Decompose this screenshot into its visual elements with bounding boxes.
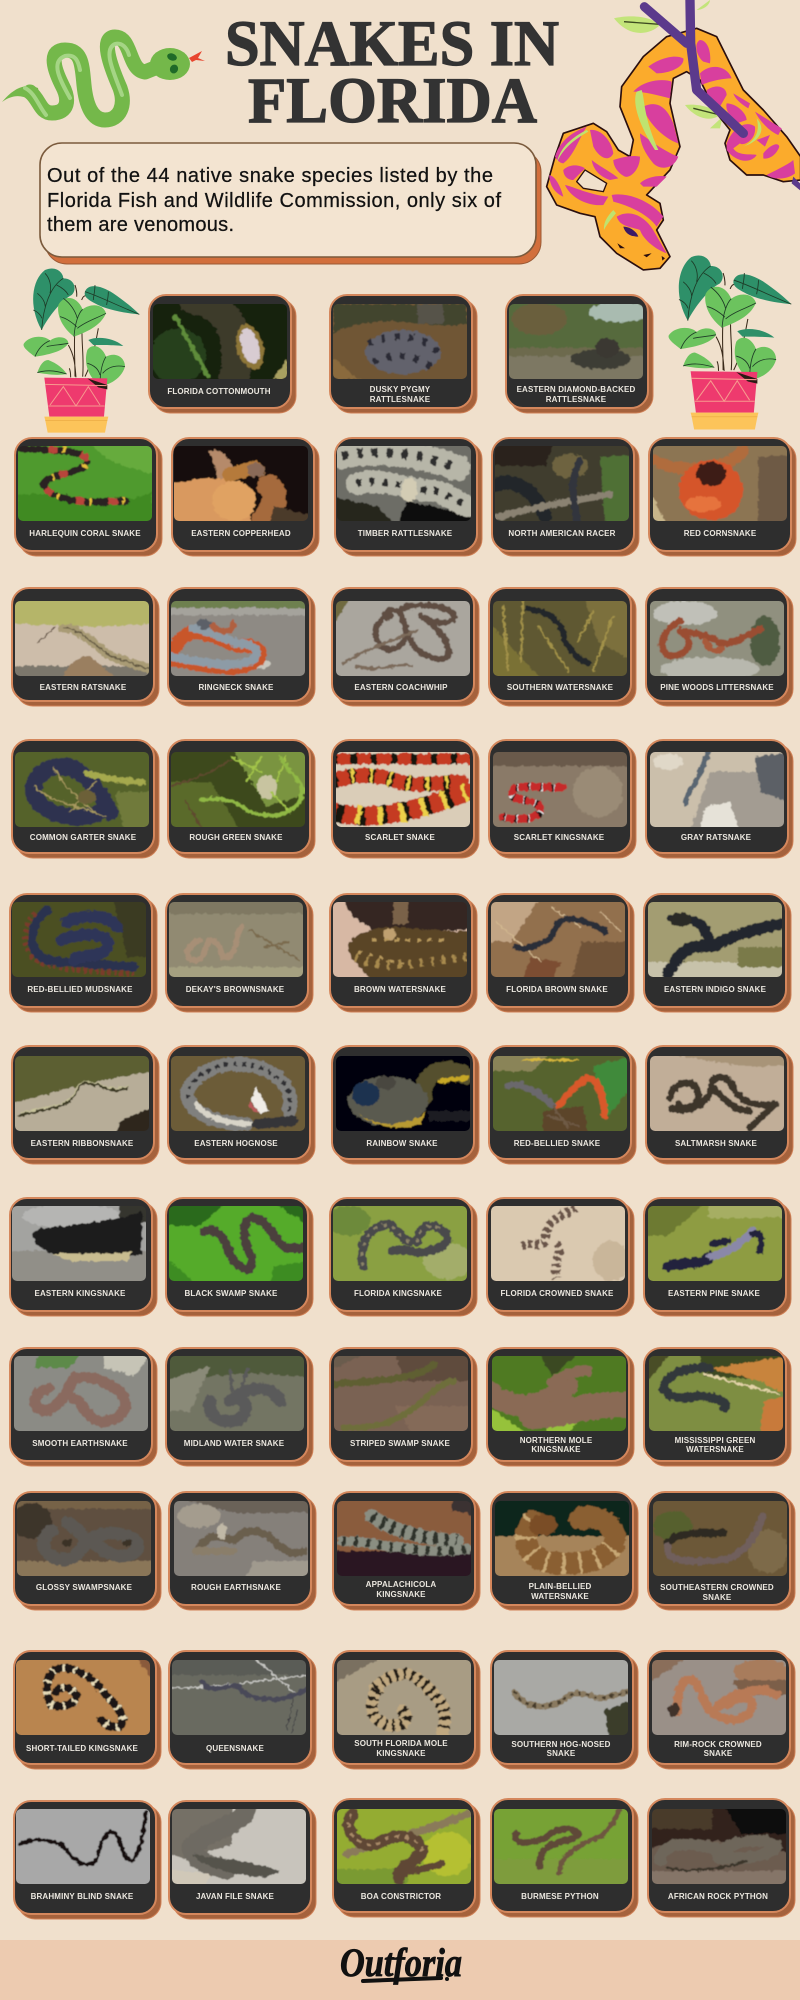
label	[354, 1739, 448, 1758]
photo: Southeastern Crowned Snake	[647, 1495, 793, 1582]
label: RED-BELLIED SNAKE	[514, 1139, 601, 1148]
label: RATTLESNAKE	[370, 395, 431, 404]
card: DeKay's Brownsnake	[163, 894, 313, 1012]
label: EASTERN DIAMOND-BACKED	[517, 385, 635, 394]
card: Burmese Python	[488, 1799, 638, 1917]
card: Rough Green Snake	[165, 740, 315, 858]
label: BURMESE PYTHON	[521, 1892, 599, 1901]
label: RED-BELLIED MUDSNAKE	[27, 985, 133, 994]
label: SNAKE	[704, 1749, 733, 1758]
label: PINE WOODS LITTERSNAKE	[660, 683, 774, 692]
footer band	[0, 1940, 800, 2000]
photo: Eastern Copperhead	[174, 446, 308, 521]
card: Rough Earthsnake	[168, 1492, 316, 1610]
card: North American Racer	[489, 438, 639, 556]
label: FLORIDA COTTONMOUTH	[167, 387, 271, 396]
label	[520, 1436, 593, 1454]
photo: Southern Watersnake	[493, 601, 627, 676]
photo: North American Racer	[495, 446, 629, 521]
photo: Scarlet Kingsnake	[493, 752, 627, 827]
photo: DeKay's Brownsnake	[169, 902, 303, 977]
label	[517, 385, 635, 404]
label: EASTERN HOGNOSE	[194, 1139, 278, 1148]
label: APPALACHICOLA	[366, 1580, 436, 1589]
label: KINGSNAKE	[531, 1445, 581, 1454]
photo: Red-Bellied Mudsnake	[12, 902, 146, 977]
label: BLACK SWAMP SNAKE	[184, 1289, 278, 1298]
label: BROWN WATERSNAKE	[354, 985, 447, 994]
label: EASTERN COPPERHEAD	[191, 529, 291, 538]
photo: Mississippi Green Watersnake	[643, 1350, 789, 1437]
card: African Rock Python	[646, 1799, 795, 1917]
photo: Queensnake	[166, 1654, 312, 1741]
card: Florida Crowned Snake	[485, 1198, 634, 1316]
label: NORTHERN MOLE	[520, 1436, 593, 1445]
photo: Florida Cottonmouth	[153, 304, 287, 379]
photo: Rough Green Snake	[171, 752, 305, 827]
card: Southern Watersnake	[487, 588, 636, 706]
card: Eastern Coachwhip	[330, 588, 479, 706]
label: RED CORNSNAKE	[684, 529, 757, 538]
card: Saltmarsh Snake	[644, 1046, 793, 1164]
label: KINGSNAKE	[376, 1749, 426, 1758]
callout: intro text: Out of the 44 native snake species listed by the	[47, 165, 493, 187]
label: EASTERN COACHWHIP	[354, 683, 448, 692]
label: PLAIN-BELLIED	[529, 1582, 591, 1591]
callout: intro text: them are venomous.	[47, 214, 234, 236]
card: Eastern Diamond-Backed Rattlesnake	[503, 295, 653, 413]
callout: intro text: Florida Fish and Wildlife Commission, only six of	[47, 190, 501, 212]
label: DEKAY'S BROWNSNAKE	[186, 985, 285, 994]
card: Striped Swamp Snake	[328, 1348, 477, 1466]
card: Florida Kingsnake	[326, 1198, 477, 1316]
label: MISSISSIPPI GREEN	[675, 1436, 755, 1445]
title	[225, 8, 559, 137]
card: Rim-Rock Crowned Snake	[646, 1651, 795, 1769]
photo: Black Swamp Snake	[163, 1200, 309, 1287]
photo: Eastern Pine Snake	[642, 1200, 788, 1287]
card: Plain-Bellied Watersnake	[489, 1492, 638, 1610]
card: Florida Cottonmouth	[147, 295, 296, 413]
label: EASTERN INDIGO SNAKE	[664, 985, 767, 994]
photo: Boa Constrictor	[331, 1803, 477, 1890]
label: SALTMARSH SNAKE	[675, 1139, 758, 1148]
photo: Rim-Rock Crowned Snake	[646, 1654, 792, 1741]
card: Eastern Pine Snake	[642, 1198, 791, 1316]
label: EASTERN RIBBONSNAKE	[31, 1139, 134, 1148]
label: RAINBOW SNAKE	[366, 1139, 438, 1148]
photo: Pine Woods Littersnake	[650, 601, 784, 676]
photo: Javan File Snake	[166, 1803, 312, 1890]
label: QUEENSNAKE	[206, 1744, 264, 1753]
photo: Short-Tailed Kingsnake	[10, 1654, 156, 1741]
label: ROUGH GREEN SNAKE	[189, 833, 283, 842]
card: Rainbow Snake	[330, 1046, 479, 1164]
label: FLORIDA CROWNED SNAKE	[500, 1289, 614, 1298]
card: Southeastern Crowned Snake	[647, 1492, 795, 1610]
label: EASTERN PINE SNAKE	[668, 1289, 761, 1298]
label	[674, 1740, 762, 1758]
photo: Striped Swamp Snake	[328, 1350, 474, 1437]
label: EASTERN KINGSNAKE	[34, 1289, 126, 1298]
card: Red-Bellied Snake	[487, 1046, 636, 1164]
card: Midland Water Snake	[164, 1348, 313, 1466]
card: Eastern Copperhead	[168, 438, 319, 556]
label: SOUTHEASTERN CROWNED	[660, 1583, 774, 1592]
icon: potted plant right	[669, 255, 791, 430]
photo: Scarlet Snake	[336, 752, 470, 827]
card: Florida Brown Snake	[485, 894, 634, 1012]
card: Queensnake	[166, 1651, 316, 1769]
photo: South Florida Mole Kingsnake	[331, 1654, 477, 1741]
label: TIMBER RATTLESNAKE	[358, 529, 453, 538]
label: SCARLET KINGSNAKE	[514, 833, 605, 842]
photo: Red-Bellied Snake	[487, 1050, 633, 1137]
icon: green snake	[2, 37, 205, 120]
card: Northern Mole Kingsnake	[486, 1348, 634, 1466]
photo: Dusky Pygmy Rattlesnake	[333, 304, 467, 379]
card: Black Swamp Snake	[163, 1198, 313, 1316]
label	[660, 1583, 774, 1602]
label: RINGNECK SNAKE	[198, 683, 274, 692]
label: SCARLET SNAKE	[365, 833, 435, 842]
card: Brahminy Blind Snake	[10, 1801, 161, 1919]
icon: tropical python on branch	[547, 0, 800, 270]
photo: Gray Ratsnake	[650, 752, 784, 827]
card: Smooth Earthsnake	[8, 1348, 157, 1466]
photo: Northern Mole Kingsnake	[486, 1350, 632, 1437]
label: SNAKE	[547, 1749, 576, 1758]
photo: Glossy Swampsnake	[11, 1495, 157, 1582]
label: COMMON GARTER SNAKE	[30, 833, 137, 842]
photo: Florida Brown Snake	[485, 896, 631, 983]
label	[511, 1740, 611, 1758]
label: SOUTHERN HOG-NOSED	[511, 1740, 611, 1749]
card: Red-Bellied Mudsnake	[6, 894, 157, 1012]
label	[370, 385, 431, 404]
label: SMOOTH EARTHSNAKE	[32, 1439, 128, 1448]
photo: Eastern Kingsnake	[6, 1200, 152, 1287]
photo: Timber Rattlesnake	[337, 446, 471, 521]
callout: intro text	[40, 143, 541, 264]
photo: Plain-Bellied Watersnake	[489, 1495, 635, 1582]
card: Glossy Swampsnake	[11, 1492, 161, 1610]
photo: Eastern Ratsnake	[15, 601, 149, 676]
card: Harlequin Coral Snake	[12, 438, 162, 556]
photo: Brahminy Blind Snake	[10, 1803, 156, 1890]
card: Short-Tailed Kingsnake	[10, 1651, 161, 1769]
photo: Eastern Indigo Snake	[642, 896, 788, 983]
label: GRAY RATSNAKE	[681, 833, 752, 842]
photo: Eastern Hognose	[165, 1050, 311, 1137]
label: SNAKE	[703, 1593, 732, 1602]
label: KINGSNAKE	[376, 1590, 426, 1599]
label: RATTLESNAKE	[546, 395, 607, 404]
card: Gray Ratsnake	[644, 740, 793, 858]
card: Appalachicola Kingsnake	[331, 1492, 480, 1610]
label: RIM-ROCK CROWNED	[674, 1740, 762, 1749]
photo: Harlequin Coral Snake	[18, 446, 152, 521]
label: GLOSSY SWAMPSNAKE	[36, 1583, 133, 1592]
label	[675, 1436, 755, 1454]
card: Eastern Ratsnake	[9, 588, 159, 706]
photo: Saltmarsh Snake	[644, 1050, 790, 1137]
card: Timber Rattlesnake	[331, 438, 482, 556]
label: EASTERN RATSNAKE	[40, 683, 127, 692]
photo: Rough Earthsnake	[168, 1495, 314, 1582]
photo: Appalachicola Kingsnake	[331, 1495, 477, 1582]
card: Brown Watersnake	[327, 894, 477, 1012]
card: Common Garter Snake	[9, 740, 159, 858]
photo: African Rock Python	[646, 1803, 792, 1890]
label: BOA CONSTRICTOR	[361, 1892, 441, 1901]
card: Scarlet Snake	[330, 740, 479, 858]
card: Eastern Kingsnake	[6, 1198, 157, 1316]
photo: Eastern Coachwhip	[336, 601, 470, 676]
label	[529, 1582, 591, 1601]
label: MIDLAND WATER SNAKE	[184, 1439, 285, 1448]
card: Eastern Indigo Snake	[642, 894, 791, 1012]
photo: Common Garter Snake	[15, 752, 149, 827]
card: Red Cornsnake	[647, 438, 796, 556]
logo: Outforia: Outforia	[340, 1940, 462, 1985]
label: WATERSNAKE	[531, 1592, 589, 1601]
label: FLORIDA BROWN SNAKE	[506, 985, 608, 994]
label: WATERSNAKE	[686, 1445, 744, 1454]
label: ROUGH EARTHSNAKE	[191, 1583, 281, 1592]
label: SOUTHERN WATERSNAKE	[507, 683, 614, 692]
photo: Brown Watersnake	[327, 896, 473, 983]
photo: Southern Hog-Nosed Snake	[488, 1654, 634, 1741]
label: SOUTH FLORIDA MOLE	[354, 1739, 448, 1748]
label: STRIPED SWAMP SNAKE	[350, 1439, 451, 1448]
photo: Burmese Python	[488, 1803, 634, 1890]
card: Mississippi Green Watersnake	[643, 1348, 791, 1466]
label: NORTH AMERICAN RACER	[508, 529, 616, 538]
card: Southern Hog-Nosed Snake	[488, 1651, 638, 1769]
photo: Red Cornsnake	[653, 446, 787, 521]
label	[366, 1580, 436, 1599]
title: FLORIDA	[248, 65, 537, 137]
label: DUSKY PYGMY	[370, 385, 431, 394]
label: SHORT-TAILED KINGSNAKE	[26, 1744, 139, 1753]
card: Ringneck Snake	[165, 588, 315, 706]
label: HARLEQUIN CORAL SNAKE	[29, 529, 141, 538]
label: FLORIDA KINGSNAKE	[354, 1289, 443, 1298]
photo: Midland Water Snake	[164, 1350, 310, 1437]
photo: Florida Crowned Snake	[485, 1200, 631, 1287]
photo: Rainbow Snake	[330, 1050, 476, 1137]
label: AFRICAN ROCK PYTHON	[668, 1892, 768, 1901]
card: South Florida Mole Kingsnake	[331, 1651, 480, 1769]
label: JAVAN FILE SNAKE	[196, 1892, 275, 1901]
photo: Ringneck Snake	[171, 601, 305, 676]
card: Eastern Hognose	[165, 1046, 315, 1164]
photo: Florida Kingsnake	[326, 1200, 473, 1287]
card: Boa Constrictor	[331, 1799, 480, 1917]
title: SNAKES IN	[225, 8, 559, 80]
card: Pine Woods Littersnake	[644, 588, 793, 706]
photo: Eastern Ribbonsnake	[9, 1050, 155, 1137]
photo: Smooth Earthsnake	[8, 1350, 154, 1437]
card: Dusky Pygmy Rattlesnake	[327, 295, 477, 413]
label: BRAHMINY BLIND SNAKE	[31, 1892, 134, 1901]
card: Eastern Ribbonsnake	[9, 1046, 159, 1164]
card: Scarlet Kingsnake	[487, 740, 636, 858]
photo: Eastern Diamond-Backed Rattlesnake	[509, 304, 643, 379]
icon: potted plant left	[24, 268, 139, 433]
card: Javan File Snake	[166, 1801, 316, 1919]
